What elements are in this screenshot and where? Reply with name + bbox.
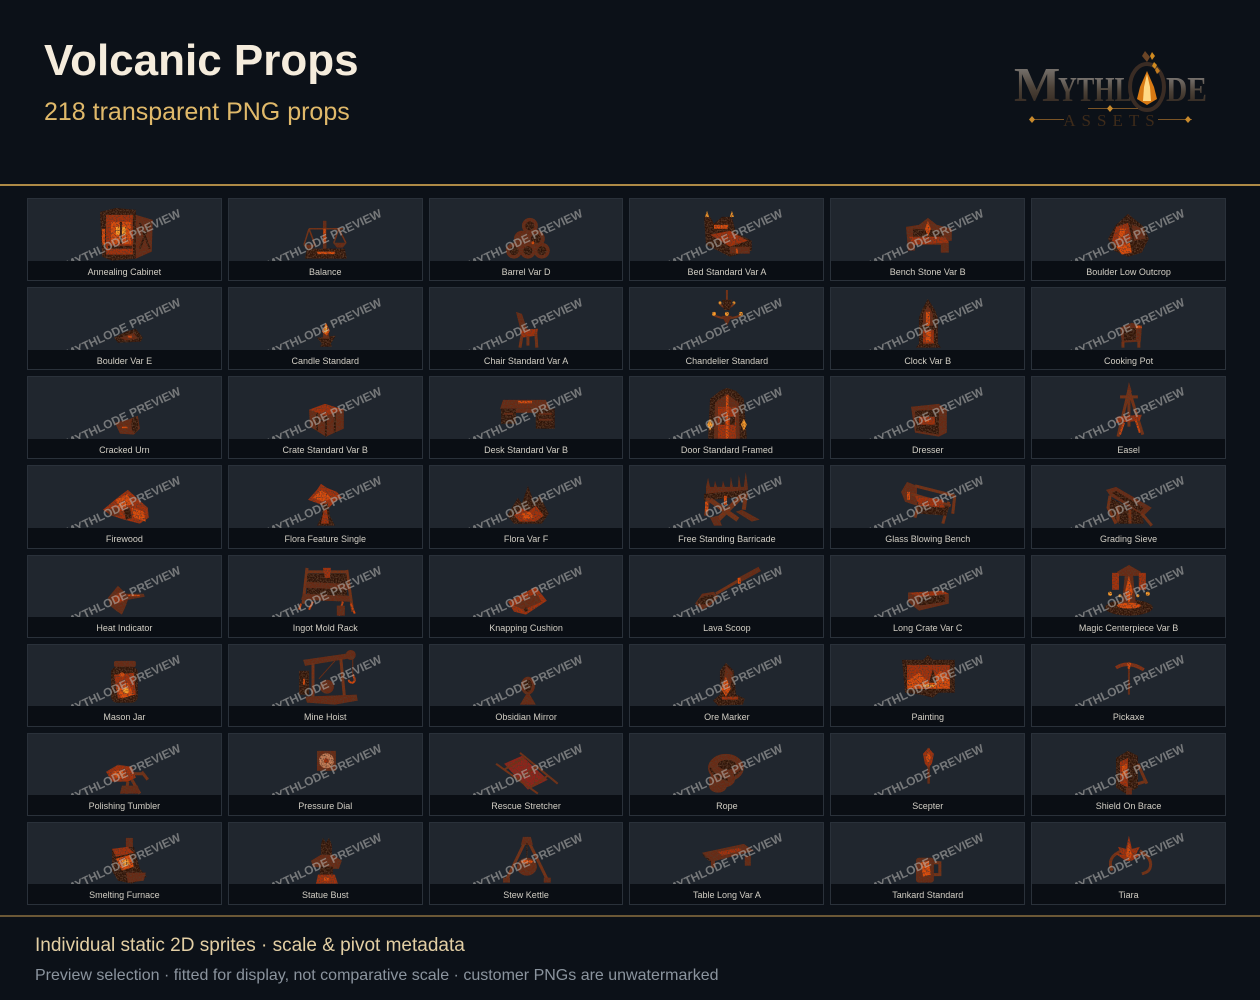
caption: Dresser [912,445,944,455]
prop: Rope [709,754,744,792]
prop: Boulder Low Outcrop [1108,214,1149,257]
prop: Annealing Cabinet [100,208,153,261]
prop: Lava Scoop [696,568,760,609]
card: Polishing Tumbler [27,733,222,816]
prop: Boulder Var E [114,329,143,343]
caption: Shield On Brace [1096,801,1161,811]
caption: Bed Standard Var A [687,267,766,277]
prop: Cracked Urn [115,416,140,435]
card: Ingot Mold Rack [228,554,423,638]
prop: Tiara [1111,836,1151,874]
prop: Dresser [911,404,947,437]
card: Cracked Urn [27,376,222,459]
card: Chair Standard Var A [429,287,623,370]
caption: Knapping Cushion [489,623,563,633]
card: Magic Centerpiece Var B [1031,554,1226,638]
card: Long Crate Var C [830,554,1025,638]
caption: Bench Stone Var B [890,267,966,277]
caption: Ore Marker [704,712,750,722]
footer: primary note: Individual static 2D sprites · scale & pivot metadata [35,935,465,956]
prop: Firewood [103,490,149,524]
card: Flora Var F [429,465,623,548]
prop: Statue Bust [311,838,342,883]
caption: Boulder Var E [97,356,152,366]
card: Free Standing Barricade [629,465,824,548]
card: Annealing Cabinet [27,198,222,281]
caption: Flora Var F [504,534,548,544]
card: Pressure Dial [228,733,423,816]
card: Table Long Var A [629,822,824,905]
card: Rescue Stretcher [429,733,623,816]
caption: Cracked Urn [99,445,150,455]
prop: Chair Standard Var A [516,312,537,348]
prop: Balance [303,221,347,259]
card: Lava Scoop [629,554,824,638]
caption: Balance [309,267,342,277]
caption: Grading Sieve [1100,534,1157,544]
card: Heat Indicator [27,554,222,638]
card: Obsidian Mirror [429,644,623,727]
caption: Ingot Mold Rack [293,623,358,633]
prop: Scepter [923,748,934,783]
card: Candle Standard [228,287,423,370]
card: Mason Jar [27,644,222,727]
prop: Pressure Dial [317,751,336,771]
card: Shield On Brace [1031,733,1226,816]
prop: Smelting Furnace [112,838,147,883]
caption: Firewood [106,534,143,544]
logo: Mythlode Assets: M [1014,57,1060,112]
caption: Boulder Low Outcrop [1086,267,1171,277]
prop: Painting [902,655,955,697]
prop: Barrel Var D [506,218,549,259]
caption: Tiara [1118,890,1139,900]
prop: Long Crate Var C [908,590,949,610]
card: Pickaxe [1031,644,1226,727]
card: Barrel Var D [429,198,623,281]
caption: Pressure Dial [298,801,352,811]
prop: Easel [1116,382,1143,437]
card: Mine Hoist [228,644,423,727]
prop: Magic Centerpiece Var B [1105,564,1153,615]
prop: Door Standard Framed [708,388,747,439]
logo: Mythlode Assets [1014,51,1207,130]
card: Smelting Furnace [27,822,222,905]
prop: Desk Standard Var B [500,400,554,429]
card: Cooking Pot [1031,287,1226,370]
card: Clock Var B [830,287,1025,370]
caption: Barrel Var D [502,267,550,277]
prop: Pickaxe [1116,662,1144,694]
prop: Ingot Mold Rack [299,567,355,615]
caption: Chair Standard Var A [484,356,568,366]
panel: prop grid [27,198,1226,905]
card: Easel [1031,376,1226,459]
prop: Flora Var F [507,486,548,524]
prop: Tankard Standard [916,858,940,882]
card: Rope [629,733,824,816]
caption: Tankard Standard [892,890,963,900]
caption: Long Crate Var C [893,623,962,633]
card: Scepter [830,733,1025,816]
prop: Free Standing Barricade [705,472,760,526]
caption: Candle Standard [291,356,359,366]
prop: Table Long Var A [703,844,754,868]
footer divider [0,915,1260,917]
caption: Polishing Tumbler [89,801,160,811]
header divider [0,184,1260,186]
card: Flora Feature Single [228,465,423,548]
prop: Clock Var B [916,299,941,348]
caption: Crate Standard Var B [283,445,368,455]
logo: Mythlode Assets: DE [1166,70,1207,109]
prop: Mason Jar [111,661,138,702]
caption: Glass Blowing Bench [885,534,970,544]
card: Glass Blowing Bench [830,465,1025,548]
caption: Cooking Pot [1104,356,1153,366]
card: Ore Marker [629,644,824,727]
prop: Rescue Stretcher [496,753,557,793]
prop: Grading Sieve [1106,487,1152,526]
caption: Flora Feature Single [284,534,366,544]
prop: Chandelier Standard [713,290,743,326]
caption: Rescue Stretcher [491,801,561,811]
caption: Smelting Furnace [89,890,160,900]
caption: Painting [911,712,944,722]
prop: Mine Hoist [299,650,358,704]
caption: Lava Scoop [703,623,751,633]
prop: Knapping Cushion [508,586,546,614]
caption: Chandelier Standard [686,356,768,366]
card: Bench Stone Var B [830,198,1025,281]
card: Balance [228,198,423,281]
prop: Glass Blowing Bench [901,482,955,524]
card: Stew Kettle [429,822,623,905]
prop: Flora Feature Single [308,484,342,526]
caption: Easel [1117,445,1140,455]
prop: Heat Indicator [108,585,145,614]
card: Statue Bust [228,822,423,905]
prop: Bed Standard Var A [705,211,752,257]
prop: Candle Standard [317,323,336,347]
prop: Bench Stone Var B [906,218,952,253]
card: Bed Standard Var A [629,198,824,281]
card: Crate Standard Var B [228,376,423,459]
prop: Obsidian Mirror [520,676,536,704]
caption: Stew Kettle [503,890,549,900]
card: Boulder Var E [27,287,222,370]
caption: Clock Var B [904,356,951,366]
caption: Door Standard Framed [681,445,773,455]
caption: Desk Standard Var B [484,445,568,455]
caption: Magic Centerpiece Var B [1079,623,1178,633]
card: Tiara [1031,822,1226,905]
prop: Cooking Pot [1120,323,1142,348]
prop: Shield On Brace [1116,751,1147,794]
caption: Annealing Cabinet [88,267,161,277]
caption: Rope [716,801,738,811]
logo: Mythlode Assets: ASSETS [1063,111,1161,130]
caption: Statue Bust [302,890,348,900]
prop: Crate Standard Var B [309,404,344,437]
footer: secondary note: Preview selection · fitted for display, not comparative scale · customer PNGs are unwatermarked [35,967,719,984]
card: Knapping Cushion [429,554,623,638]
card: Tankard Standard [830,822,1025,905]
header: subtitle: 218 transparent PNG props [44,98,350,126]
card: Boulder Low Outcrop [1031,198,1226,281]
header: title: Volcanic Props [44,36,359,85]
card: Grading Sieve [1031,465,1226,548]
caption: Mine Hoist [304,712,346,722]
card: Firewood [27,465,222,548]
caption: Table Long Var A [693,890,761,900]
card: Painting [830,644,1025,727]
caption: Pickaxe [1113,712,1144,722]
caption: Free Standing Barricade [678,534,776,544]
caption: Obsidian Mirror [495,712,557,722]
card: Door Standard Framed [629,376,824,459]
caption: Scepter [912,801,943,811]
prop: Polishing Tumbler [106,765,148,793]
logo: Mythlode Assets: YTHL [1058,70,1132,109]
card: Dresser [830,376,1025,459]
card: Chandelier Standard [629,287,824,370]
prop: Ore Marker [713,663,745,705]
prop: Stew Kettle [503,837,550,882]
caption: Mason Jar [103,712,145,722]
caption: Heat Indicator [96,623,152,633]
card: Desk Standard Var B [429,376,623,459]
